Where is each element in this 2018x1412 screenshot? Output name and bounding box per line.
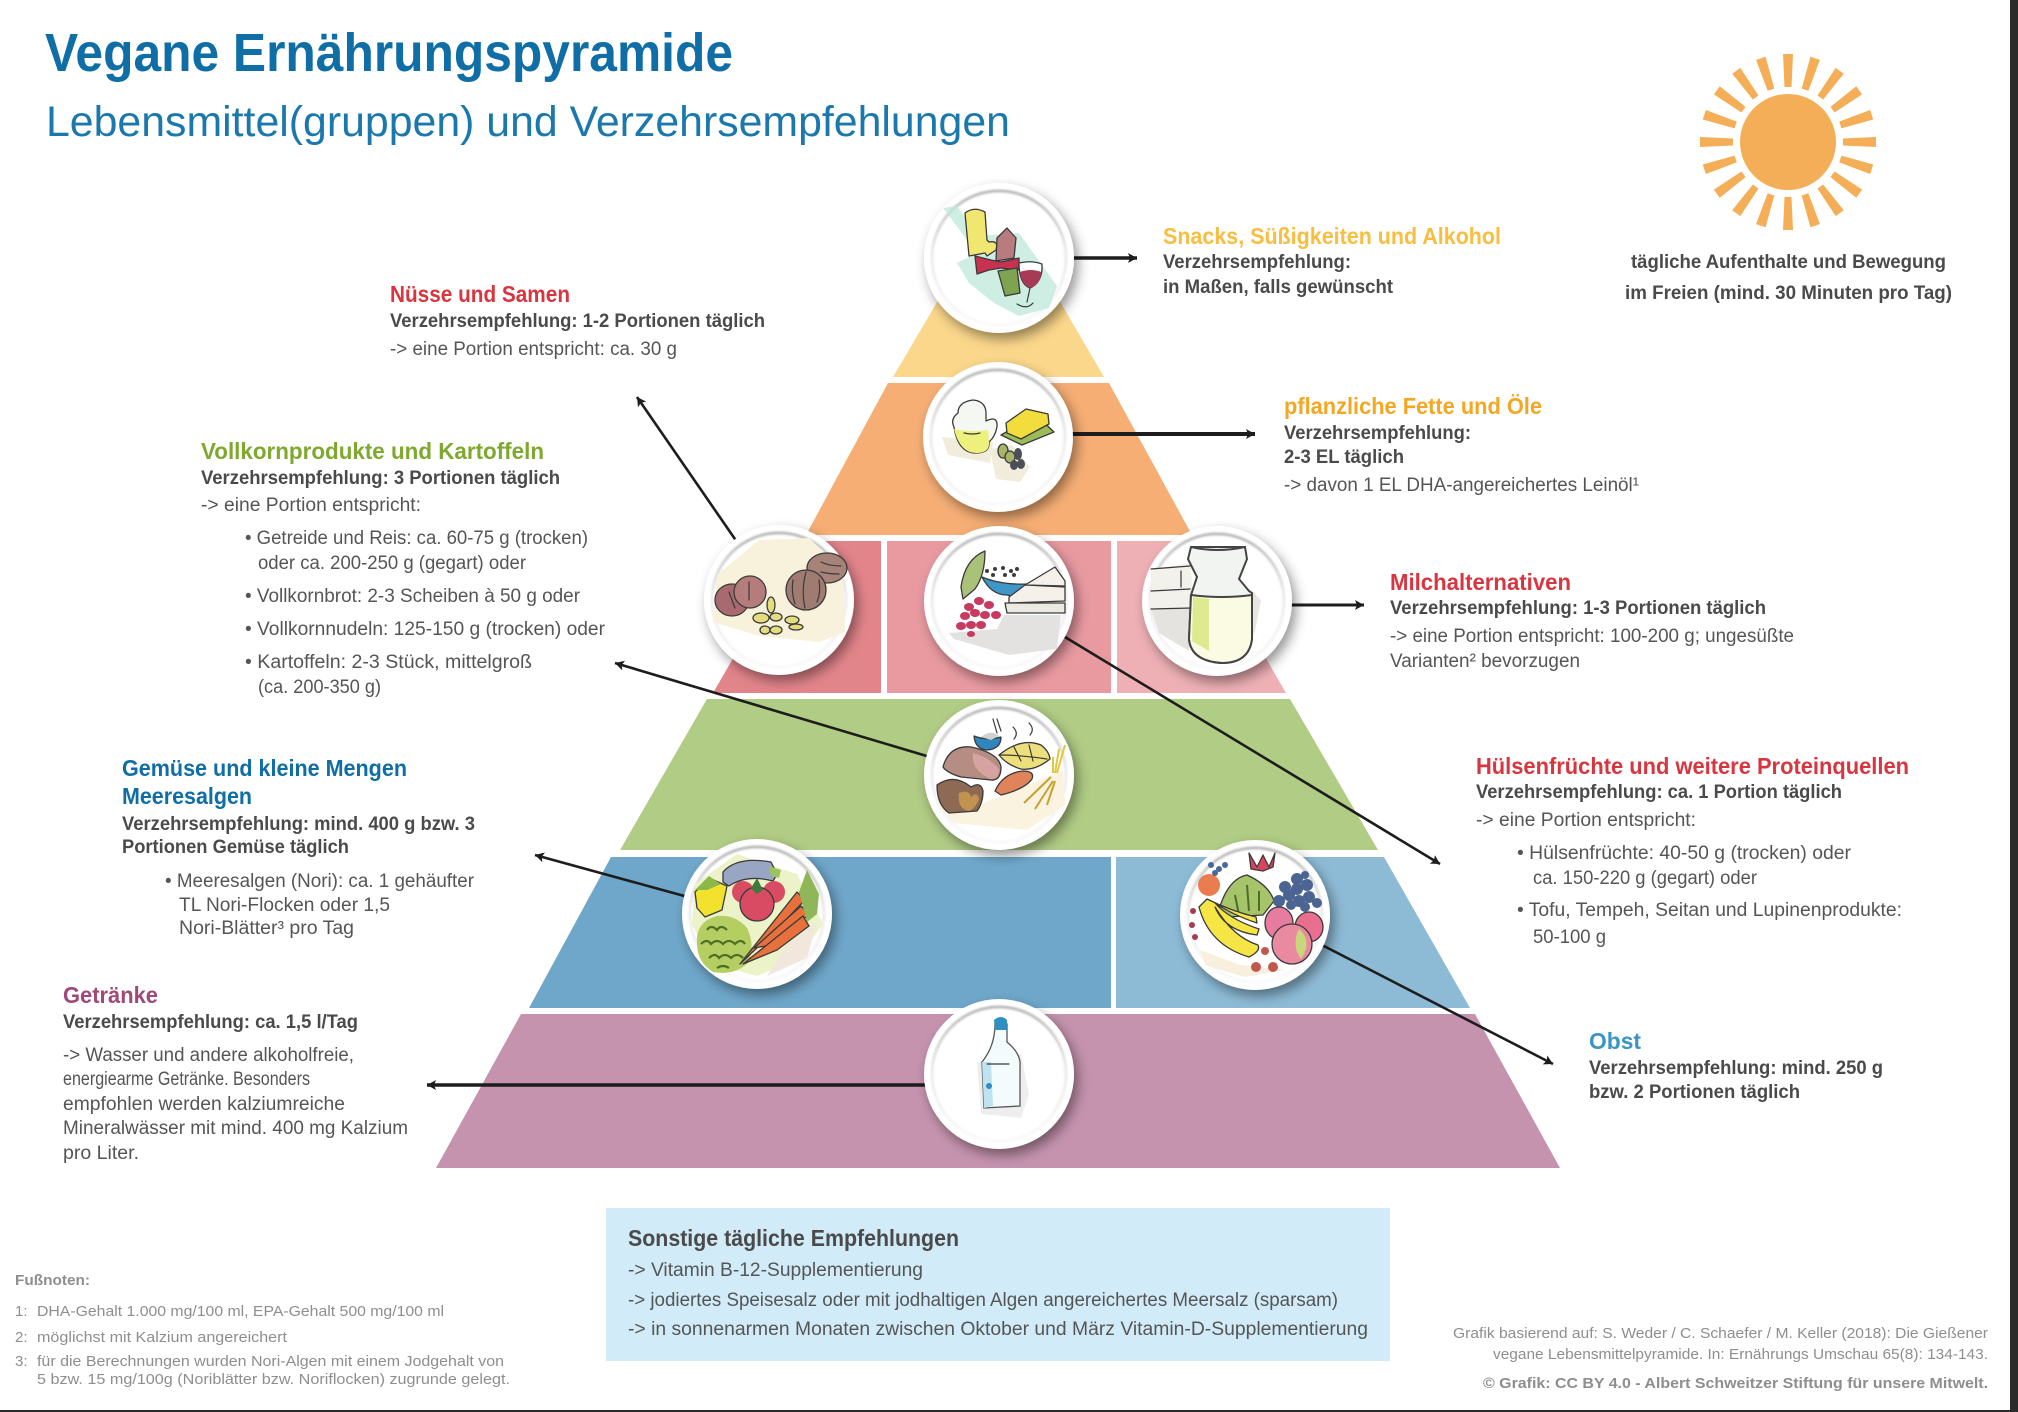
- tier: beverages: [436, 1014, 1560, 1168]
- source and credit: Grafik basierend auf: S. Weder / C. Schaefer / M. Keller (2018): Die Gießener: [1453, 1325, 1988, 1342]
- text: beverages: empfohlen werden kalziumreiche: [63, 1094, 345, 1115]
- arrow: dairy alternatives: [1285, 604, 1364, 606]
- tier: nuts: [713, 541, 881, 693]
- text: whole grains and potatoes: Verzehrsempfehlung: 3 Portionen täglich: [201, 468, 560, 489]
- text: beverages: [63, 982, 408, 1164]
- text: dairy alternatives: Milchalternativen: [1390, 569, 1571, 595]
- text: dairy alternatives: Verzehrsempfehlung: 1-3 Portionen täglich: [1390, 598, 1766, 619]
- text: nuts and seeds: -> eine Portion entspricht: ca. 30 g: [390, 339, 677, 360]
- arrow: legumes: [1060, 634, 1440, 864]
- tier: snacks: [893, 197, 1104, 377]
- text: whole grains and potatoes: -> eine Portion entspricht:: [201, 495, 421, 516]
- text: legumes and protein sources: • Hülsenfrüchte: 40-50 g (trocken) oder: [1517, 843, 1852, 864]
- footnotes: DHA-Gehalt 1.000 mg/100 ml, EPA-Gehalt 500 mg/100 ml: [37, 1303, 444, 1320]
- arrow: grains: [615, 663, 930, 757]
- text: vegetables: Meeresalgen: [122, 783, 252, 809]
- text: dairy alternatives: -> eine Portion entspricht: 100-200 g; ungesüßte: [1390, 626, 1794, 647]
- tier: whole grains: [620, 699, 1378, 850]
- text: snacks: Verzehrsempfehlung:: [1163, 252, 1351, 273]
- text: vegetables: Verzehrsempfehlung: mind. 400 g bzw. 3: [122, 814, 475, 835]
- footnotes: 3:: [15, 1353, 28, 1370]
- sun caption: tägliche Aufenthalte und Bewegung: [1631, 252, 1946, 273]
- text: whole grains and potatoes: oder ca. 200-250 g (gegart) oder: [258, 553, 527, 574]
- arrow: snacks: [1070, 256, 1137, 260]
- plate: fruit: [1180, 840, 1330, 990]
- plate: whole grains and potatoes: [924, 700, 1074, 850]
- text: whole grains and potatoes: (ca. 200-350 g): [258, 677, 381, 698]
- plate: nuts and seeds: [704, 525, 854, 675]
- text: whole grains and potatoes: Vollkornprodukte und Kartoffeln: [201, 438, 544, 464]
- tier: legumes: [887, 541, 1111, 693]
- text: beverages: energiearme Getränke. Besonders: [63, 1069, 310, 1090]
- text: vegetables: • Meeresalgen (Nori): ca. 1 gehäufter: [165, 871, 475, 892]
- text: whole grains and potatoes: [201, 438, 606, 698]
- tier: fats and oils: [806, 383, 1192, 535]
- text: snacks: [1163, 223, 1501, 298]
- text: legumes and protein sources: Verzehrsempfehlung: ca. 1 Portion täglich: [1476, 782, 1842, 803]
- pyramid: [436, 197, 1560, 1168]
- text: legumes and protein sources: Hülsenfrüchte und weitere Proteinquellen: [1476, 753, 1909, 779]
- subtitle: Lebensmittel(gruppen) und Verzehrsempfehlungen: [46, 98, 1010, 146]
- text: fruit: [1589, 1028, 1883, 1103]
- text: nuts and seeds: [390, 281, 765, 360]
- text: fats and oils: [1284, 393, 1639, 496]
- arrow: beverages: [427, 1083, 930, 1087]
- text: vegetables: [122, 755, 475, 939]
- plate: snacks: [924, 183, 1074, 333]
- text: vegetables: TL Nori-Flocken oder 1,5: [179, 895, 390, 916]
- text: fats and oils: 2-3 EL täglich: [1284, 447, 1404, 468]
- text: legumes and protein sources: ca. 150-220 g (gegart) oder: [1533, 868, 1758, 889]
- text: vegetables: Nori-Blätter³ pro Tag: [179, 918, 354, 939]
- text: fruit: bzw. 2 Portionen täglich: [1589, 1082, 1800, 1103]
- arrow: nuts: [637, 397, 737, 542]
- text: legumes and protein sources: 50-100 g: [1533, 927, 1606, 948]
- footnotes: 2:: [15, 1329, 28, 1346]
- text: fruit: Obst: [1589, 1028, 1641, 1054]
- source and credit: © Grafik: CC BY 4.0 - Albert Schweitzer Stiftung für unsere Mitwelt.: [1483, 1375, 1988, 1392]
- text: beverages: Verzehrsempfehlung: ca. 1,5 l/Tag: [63, 1012, 358, 1033]
- text: snacks: in Maßen, falls gewünscht: [1163, 277, 1394, 298]
- footnotes: 5 bzw. 15 mg/100g (Noriblätter bzw. Noriflocken) zugrunde gelegt.: [37, 1371, 510, 1388]
- panel: other daily recommendations: Sonstige tägliche Empfehlungen: [628, 1225, 959, 1251]
- title: Vegane Ernährungspyramide: [45, 23, 733, 83]
- text: whole grains and potatoes: • Vollkornbrot: 2-3 Scheiben à 50 g oder: [245, 586, 581, 607]
- text: vegetables: Gemüse und kleine Mengen: [122, 755, 407, 781]
- panel: other daily recommendations: -> jodiertes Speisesalz oder mit jodhaltigen Algen angereichertes Meersalz (sparsam): [628, 1290, 1338, 1311]
- footnotes: für die Berechnungen wurden Nori-Algen mit einem Jodgehalt von: [37, 1353, 504, 1370]
- plate: beverages: [924, 999, 1074, 1149]
- text: beverages: Mineralwässer mit mind. 400 mg Kalzium: [63, 1118, 408, 1139]
- plate: fats and oils: [923, 362, 1073, 512]
- arrow: fruit: [1320, 944, 1553, 1064]
- tier: fruit: [1116, 857, 1470, 1008]
- tier: dairy alternatives: [1117, 541, 1286, 693]
- text: beverages: -> Wasser und andere alkoholfreie,: [63, 1045, 354, 1066]
- text: fruit: Verzehrsempfehlung: mind. 250 g: [1589, 1058, 1883, 1079]
- panel: other daily recommendations: -> in sonnenarmen Monaten zwischen Oktober und März Vitamin-D-Supplementierung: [628, 1319, 1368, 1340]
- icon: sun: [1700, 54, 1876, 230]
- text: whole grains and potatoes: • Kartoffeln: 2-3 Stück, mittelgroß: [245, 652, 532, 673]
- text: nuts and seeds: Verzehrsempfehlung: 1-2 Portionen täglich: [390, 311, 765, 332]
- plate: dairy alternatives: [1142, 526, 1292, 676]
- source and credit: [1453, 1325, 1988, 1392]
- panel: other daily recommendations: [606, 1208, 1390, 1361]
- text: whole grains and potatoes: • Vollkornnudeln: 125-150 g (trocken) oder: [245, 619, 606, 640]
- plate: vegetables: [682, 839, 832, 989]
- footnotes: [15, 1272, 510, 1388]
- text: fats and oils: Verzehrsempfehlung:: [1284, 423, 1471, 444]
- text: snacks: Snacks, Süßigkeiten und Alkohol: [1163, 223, 1501, 249]
- text: legumes and protein sources: • Tofu, Tempeh, Seitan und Lupinenprodukte:: [1517, 900, 1902, 921]
- text: legumes and protein sources: [1476, 753, 1909, 948]
- text: whole grains and potatoes: • Getreide und Reis: ca. 60-75 g (trocken): [245, 528, 588, 549]
- text: dairy alternatives: [1390, 569, 1794, 672]
- plate: legumes and protein sources: [924, 526, 1074, 676]
- text: beverages: pro Liter.: [63, 1143, 139, 1164]
- footnotes: möglichst mit Kalzium angereichert: [37, 1329, 288, 1346]
- text: fats and oils: -> davon 1 EL DHA-angereichertes Leinöl¹: [1284, 475, 1639, 496]
- text: fats and oils: pflanzliche Fette und Öle: [1284, 393, 1542, 419]
- text: vegetables: Portionen Gemüse täglich: [122, 837, 349, 858]
- sun caption: im Freien (mind. 30 Minuten pro Tag): [1625, 283, 1952, 304]
- text: beverages: Getränke: [63, 982, 158, 1008]
- arrows: [427, 258, 1553, 1085]
- arrow: fats: [1070, 432, 1255, 436]
- text: legumes and protein sources: -> eine Portion entspricht:: [1476, 810, 1696, 831]
- tier: vegetables: [529, 857, 1111, 1008]
- sun caption: [1625, 252, 1952, 304]
- text: dairy alternatives: Varianten² bevorzugen: [1390, 651, 1580, 672]
- text: nuts and seeds: Nüsse und Samen: [390, 281, 570, 307]
- footnotes: Fußnoten:: [15, 1272, 90, 1289]
- footnotes: 1:: [15, 1303, 28, 1320]
- arrow: vegetables: [535, 855, 688, 897]
- panel: other daily recommendations: -> Vitamin B-12-Supplementierung: [628, 1260, 923, 1281]
- source and credit: vegane Lebensmittelpyramide. In: Ernährungs Umschau 65(8): 134-143.: [1493, 1346, 1988, 1363]
